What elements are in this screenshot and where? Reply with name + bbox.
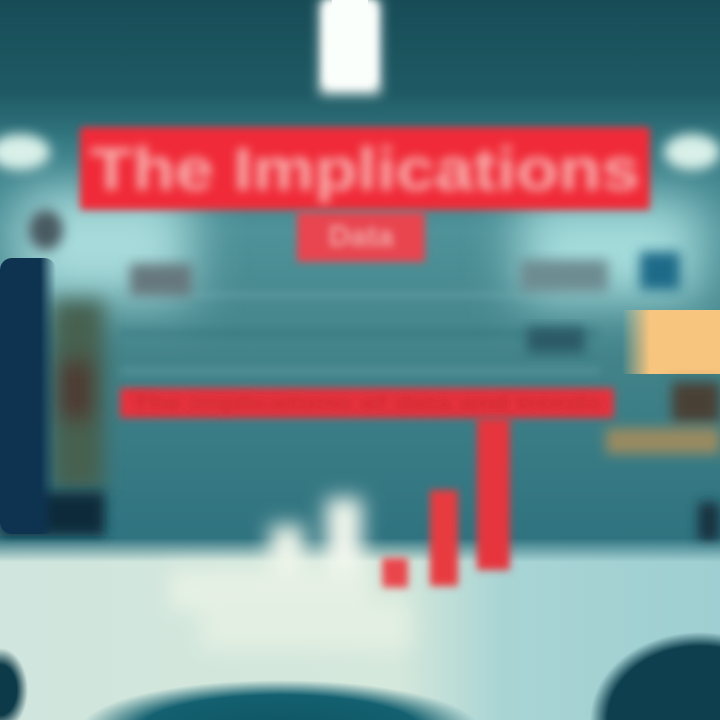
right side desk objects [606,382,720,542]
right ceiling lamp [664,134,720,170]
bottom dark arc left [0,640,30,720]
bar chart: red bars [382,418,510,588]
subtitle tag [297,212,425,262]
banner title text: The Implications [90,136,640,203]
red bar text: The implications of data and trends [132,390,602,415]
orange sign [622,310,720,374]
left small label [130,264,192,296]
right small label [520,260,608,292]
left ceiling lamp [0,134,50,170]
right lower label [527,327,585,353]
wall brick lines [120,292,600,374]
bottom dark arc center [80,670,480,720]
person on left [0,210,105,536]
side glow panels [20,190,700,300]
right blue square [640,252,680,290]
red horizontal bar [120,388,614,418]
bar chart: white bars [170,498,410,650]
subtitle text: Data [328,220,394,253]
table surface [0,538,720,720]
title banner [80,127,650,210]
bottom dark arc right [585,625,720,720]
ceiling light [320,0,380,94]
